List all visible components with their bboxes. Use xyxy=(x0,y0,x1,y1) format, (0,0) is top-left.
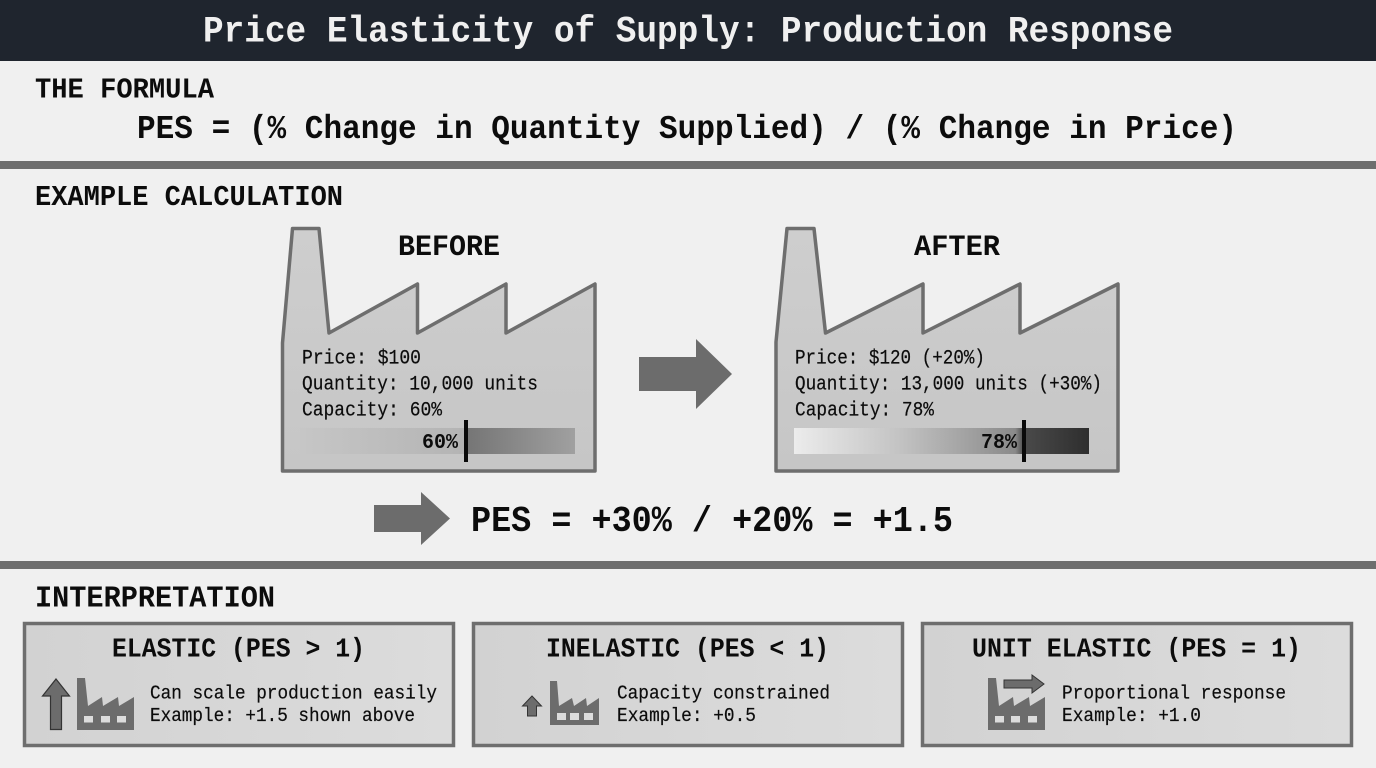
card: inelastic xyxy=(474,624,902,746)
card text: unit elastic: Proportional response xyxy=(1062,682,1286,704)
capacity bar: 60% xyxy=(300,420,575,462)
heading: example calculation: EXAMPLE CALCULATION xyxy=(35,181,343,214)
factory outline: after xyxy=(776,228,1118,471)
icon: small up arrow xyxy=(522,696,542,716)
factory: after xyxy=(776,228,1118,471)
title bar: Price Elasticity of Supply: Production Response xyxy=(203,12,1173,54)
before data: Capacity: 60% xyxy=(302,400,443,422)
card heading: elastic: ELASTIC (PES > 1) xyxy=(112,636,365,666)
card text: unit elastic xyxy=(1062,682,1286,727)
card text: inelastic xyxy=(617,682,830,727)
before data: Quantity: 10,000 units xyxy=(302,374,538,396)
card: unit elastic xyxy=(922,624,1352,746)
heading: the formula: THE FORMULA xyxy=(35,74,215,106)
card: elastic xyxy=(24,624,454,746)
card text: elastic: Example: +1.5 shown above xyxy=(150,705,415,727)
formula text: PES = (% Change in Quantity Supplied) / (% Change in Price) xyxy=(137,111,1237,149)
title bar xyxy=(0,0,1376,61)
panel: example calculation xyxy=(35,181,1118,545)
after data xyxy=(795,348,1102,422)
card text: inelastic: Capacity constrained xyxy=(617,682,830,704)
capacity bar: 60%: 60% xyxy=(422,432,458,455)
after data: Price: $120 (+20%) xyxy=(795,348,985,370)
card text: elastic: Can scale production easily xyxy=(150,682,437,704)
panel: interpretation xyxy=(24,582,1352,746)
heading: before: BEFORE xyxy=(398,231,500,265)
card text: elastic xyxy=(150,682,437,727)
result: PES calculation: PES = +30% / +20% = +1.5 xyxy=(471,501,953,542)
capacity bar: 78%: 78% xyxy=(981,432,1017,455)
card text: unit elastic: Example: +1.0 xyxy=(1062,705,1201,727)
card heading: inelastic: INELASTIC (PES < 1) xyxy=(546,636,829,666)
factory: before xyxy=(282,228,595,471)
card heading: unit elastic: UNIT ELASTIC (PES = 1) xyxy=(972,636,1301,666)
after data: Capacity: 78% xyxy=(795,400,935,422)
arrow: to result xyxy=(374,492,450,545)
icon: factory xyxy=(550,681,599,725)
capacity bar: 78% xyxy=(794,420,1089,462)
factory outline: before xyxy=(282,228,595,471)
icon: large up arrow xyxy=(42,679,70,730)
arrow: before to after xyxy=(639,339,732,409)
after data: Quantity: 13,000 units (+30%) xyxy=(795,374,1102,396)
heading: interpretation: INTERPRETATION xyxy=(35,582,275,616)
icon: factory xyxy=(988,678,1045,730)
icon: factory xyxy=(77,678,134,730)
panel: the formula xyxy=(35,74,1237,149)
card text: inelastic: Example: +0.5 xyxy=(617,705,756,727)
before data xyxy=(302,348,538,422)
heading: after: AFTER xyxy=(914,231,1000,265)
before data: Price: $100 xyxy=(302,348,421,370)
icon: right arrow xyxy=(1004,675,1044,693)
